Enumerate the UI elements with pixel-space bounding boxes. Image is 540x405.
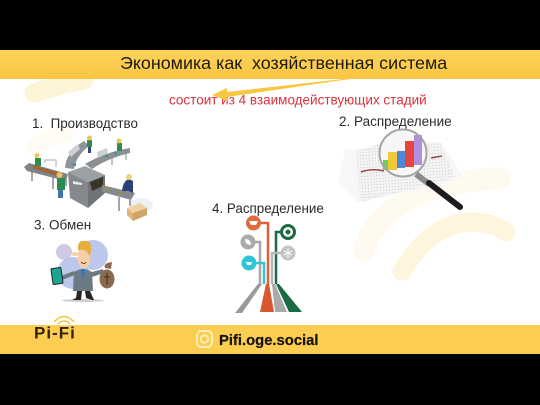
stage 1 label: 1. Производство	[32, 116, 138, 131]
icon: instagram	[197, 331, 212, 347]
logo: Pi-Fi: Pi-Fi	[34, 324, 76, 342]
stage 3 label: 3. Обмен	[34, 218, 91, 232]
stage 2 label: 2. Распределение	[339, 114, 452, 129]
title: Экономика как хозяйственная система	[120, 53, 447, 73]
stage 4 label: 4. Распределение	[212, 201, 324, 216]
icon: factory conveyor	[24, 136, 153, 221]
header band	[0, 50, 540, 79]
social handle: Pifi.oge.social	[219, 333, 318, 349]
icon: infographic tree	[235, 216, 302, 313]
decorative pale arcs	[34, 80, 506, 271]
footer band	[0, 325, 540, 354]
icon: businessman with money bag	[51, 240, 114, 302]
arrow	[212, 79, 350, 101]
icon: magnifier over charts	[338, 130, 463, 207]
subtitle: состоит из 4 взаимодействующих стадий	[169, 92, 427, 108]
